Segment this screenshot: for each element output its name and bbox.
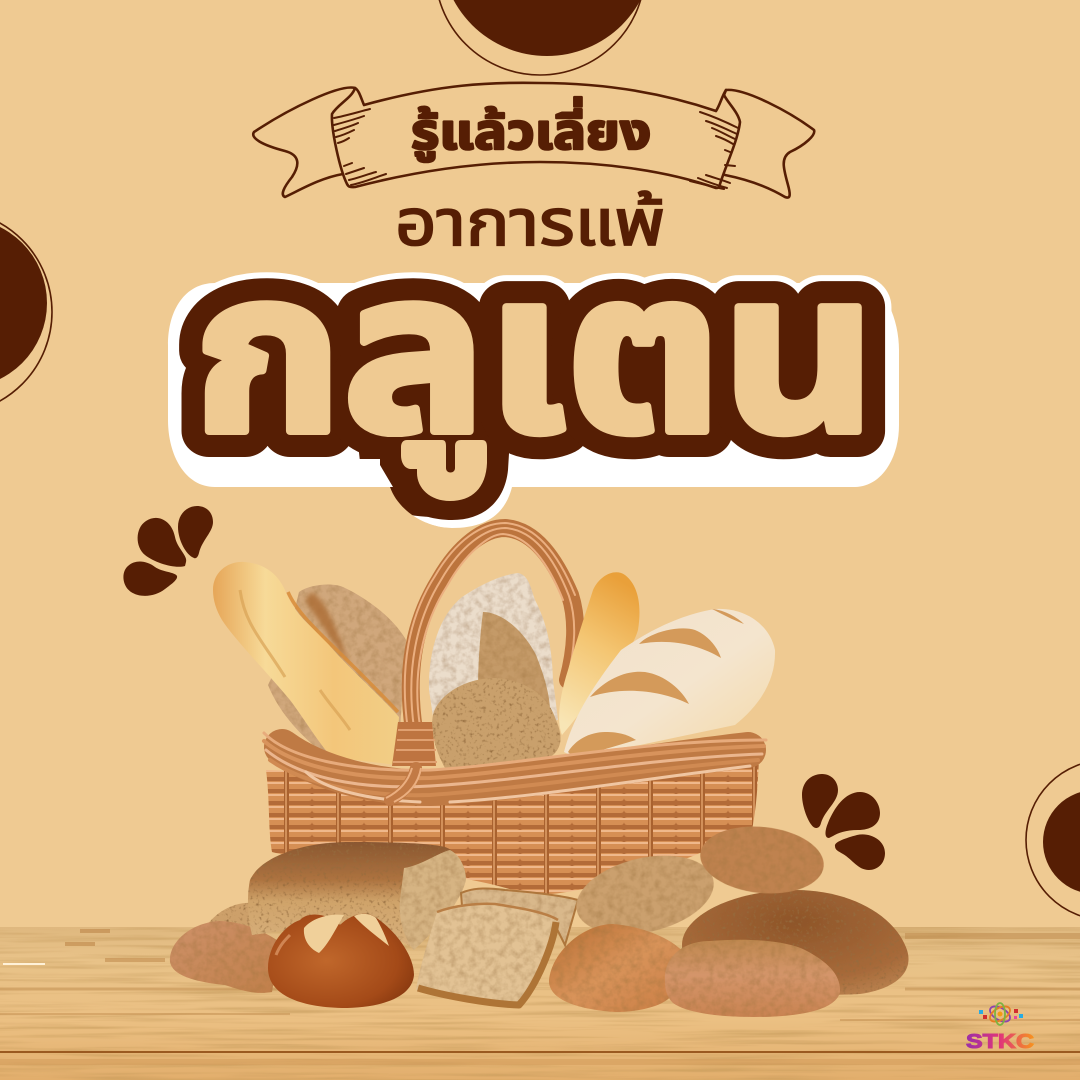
pretzel bun	[268, 914, 414, 1008]
title dark outline: กลูเตน	[194, 226, 876, 491]
front breads	[170, 821, 909, 1017]
wooden table	[0, 927, 1080, 1080]
ribbon hatch lines	[334, 109, 738, 189]
basket rim	[264, 733, 766, 802]
ribbon banner	[253, 83, 814, 198]
front floury roll	[665, 940, 840, 1017]
atom icon	[979, 1003, 1023, 1025]
dark round loaf	[682, 890, 909, 995]
ribbon main band	[332, 83, 740, 188]
ribbon right tail	[725, 90, 814, 198]
droplets right	[802, 774, 885, 870]
title vowel tail backing	[380, 437, 510, 520]
ribbon left tail	[253, 88, 355, 197]
seeded roll	[568, 843, 722, 947]
front bread slice	[416, 904, 558, 1008]
decorative circle: left	[0, 210, 52, 414]
grain loaf	[248, 842, 466, 950]
basket handle	[405, 523, 575, 730]
logo wordmark: STKC	[966, 1031, 1034, 1053]
basket body	[266, 745, 760, 896]
title descender cleanup	[352, 459, 452, 532]
back bread slice	[461, 888, 578, 945]
ribbon heading: รู้แล้วเลี่ยง	[411, 97, 651, 162]
small baguette	[559, 572, 639, 735]
long baguette	[213, 562, 399, 765]
droplets top left	[123, 506, 213, 596]
white title backing	[168, 283, 899, 528]
top right roll	[697, 821, 827, 899]
STKC logo	[966, 1003, 1034, 1053]
bread basket illustration	[213, 523, 775, 896]
main title badge	[168, 226, 899, 532]
seeded bun	[432, 678, 561, 769]
subheading: อาการแพ้	[395, 187, 665, 259]
big white loaf	[564, 609, 775, 758]
title text กลูเตน: กลูเตน	[194, 226, 876, 491]
crusty roll	[549, 924, 687, 1012]
title vowel tail	[401, 440, 487, 501]
small seed crust behind	[205, 903, 252, 935]
decorative circle: top	[435, 0, 653, 75]
handle binding	[386, 722, 437, 802]
rustic loaf behind	[268, 585, 406, 757]
left roll	[170, 921, 280, 993]
decorative circle: right	[1026, 760, 1080, 920]
title white halo: กลูเตน	[194, 226, 876, 491]
centre loaf	[429, 573, 558, 730]
